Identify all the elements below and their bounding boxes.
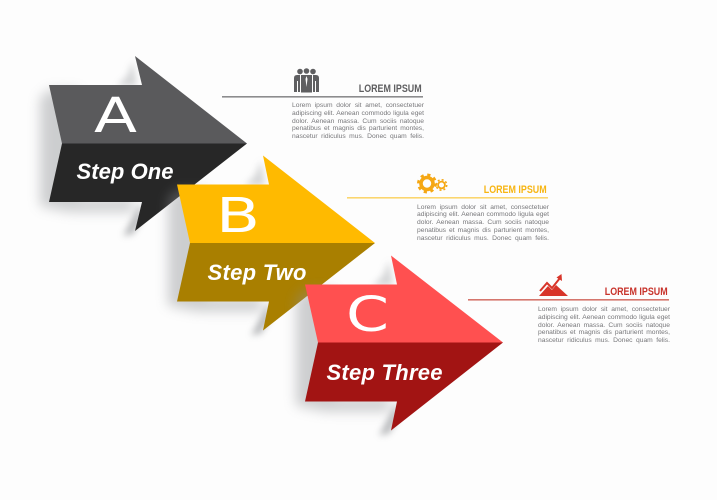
text block B: Lorem ipsum dolor sit amet, consectetuer xyxy=(417,204,549,210)
text block B: penatibus et magnis dis parturient montes, xyxy=(417,227,549,234)
divider line A xyxy=(222,96,423,98)
text block A: Lorem ipsum dolor sit amet, consectetuer xyxy=(292,102,424,109)
arrow A: Step One xyxy=(40,56,247,236)
letter A: A xyxy=(94,88,137,144)
icon: gears xyxy=(418,175,447,192)
divider line B xyxy=(347,197,548,199)
text block C: Lorem ipsum dolor sit amet, consectetuer xyxy=(538,306,670,313)
text block A: nascetur ridiculus mus. Donec quam felis. xyxy=(292,133,424,140)
arrow A upper face xyxy=(49,56,247,144)
icon: mountain chart xyxy=(539,274,568,296)
text block C: dolor. Aenean massa. Cum sociis natoque xyxy=(538,322,670,329)
text block B xyxy=(417,204,549,242)
arrow C lower face xyxy=(305,342,503,430)
text block B: dolor. Aenean massa. Cum sociis natoque xyxy=(417,219,549,226)
text block A: adipiscing elit. Aenean commodo ligula eget xyxy=(292,110,424,117)
arrow C upper face xyxy=(305,256,503,342)
label: Step Three: Step Three xyxy=(326,360,442,385)
letter B: B xyxy=(216,188,260,244)
text block C: nascetur ridiculus mus. Donec quam felis. xyxy=(538,337,670,344)
arrow B upper face xyxy=(177,156,375,243)
text block C: adipiscing elit. Aenean commodo ligula eget xyxy=(538,314,670,321)
heading B: LOREM IPSUM xyxy=(484,184,547,196)
text block A: penatibus et magnis dis parturient montes, xyxy=(292,125,424,132)
text block A xyxy=(292,102,424,140)
text block C: penatibus et magnis dis parturient montes, xyxy=(538,329,670,336)
label: Step Two: Step Two xyxy=(208,260,306,285)
divider line C xyxy=(468,299,669,301)
icon: team of people xyxy=(294,68,319,92)
heading A: LOREM IPSUM xyxy=(359,83,422,95)
text block B: adipiscing elit. Aenean commodo ligula eget xyxy=(417,211,549,218)
arrow B lower face xyxy=(177,243,375,330)
letter C: C xyxy=(346,287,389,343)
text block C xyxy=(538,306,670,344)
arrow A lower face xyxy=(49,144,247,231)
text block B: nascetur ridiculus mus. Donec quam felis. xyxy=(417,235,549,242)
arrow C: Step Three xyxy=(296,256,503,436)
arrow B: Step Two xyxy=(168,156,375,336)
label: Step One: Step One xyxy=(76,159,174,184)
text block A: dolor. Aenean massa. Cum sociis natoque xyxy=(292,118,424,125)
heading C: LOREM IPSUM xyxy=(605,286,668,298)
